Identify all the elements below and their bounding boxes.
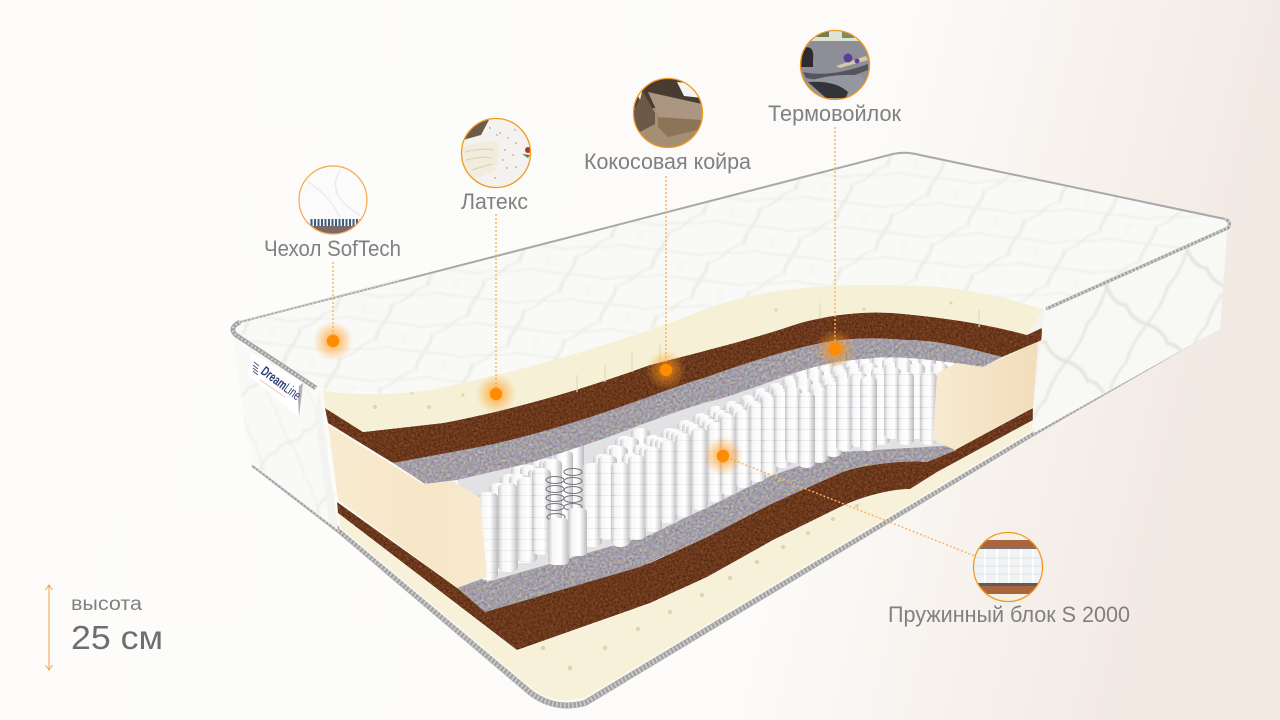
- bottom piping: [253, 328, 1215, 705]
- marker: springs: [703, 436, 743, 476]
- brand tag: [248, 352, 304, 417]
- marker: felt: [815, 329, 855, 369]
- icon: SofTech cover: [299, 166, 367, 234]
- top coir layer: [325, 312, 1042, 463]
- mattress: [232, 153, 1230, 705]
- latex perforation holes: [541, 504, 859, 670]
- bottom coir layer: [337, 408, 1033, 650]
- bottom latex layer: [338, 420, 1033, 701]
- cut-away coil springs: [546, 468, 582, 520]
- label: SofTech cover: Чехол SofTech: [264, 236, 401, 261]
- marker: coir: [646, 350, 686, 390]
- brand tag: DreamLine: [258, 363, 304, 403]
- label: thermal felt: Термовойлок: [768, 101, 901, 126]
- top quilted cover: [233, 153, 1229, 394]
- top felt layer: [393, 338, 1002, 484]
- right side cover: [1033, 224, 1230, 433]
- label: coconut coir: Кокосовая койра: [584, 149, 752, 174]
- icon: thermal felt: [800, 30, 870, 100]
- left foam block: [328, 425, 487, 588]
- label: spring block: Пружинный блок S 2000: [888, 602, 1130, 627]
- pocket spring block: [457, 340, 983, 582]
- height caption: высота: [71, 594, 142, 615]
- icon: spring block: [973, 532, 1043, 602]
- icon: coconut coir: [633, 78, 703, 148]
- icon: latex: [461, 118, 531, 188]
- top latex layer: [323, 285, 1043, 432]
- height value: 25 см: [71, 619, 163, 656]
- marker: cover: [313, 321, 353, 361]
- left side cover: [232, 328, 338, 530]
- leader lines: [333, 127, 975, 556]
- marker: latex: [476, 374, 516, 414]
- right foam block: [933, 342, 1038, 450]
- label: latex: Латекс: [461, 189, 528, 214]
- bottom felt layer: [457, 440, 957, 612]
- height arrow: [46, 585, 52, 670]
